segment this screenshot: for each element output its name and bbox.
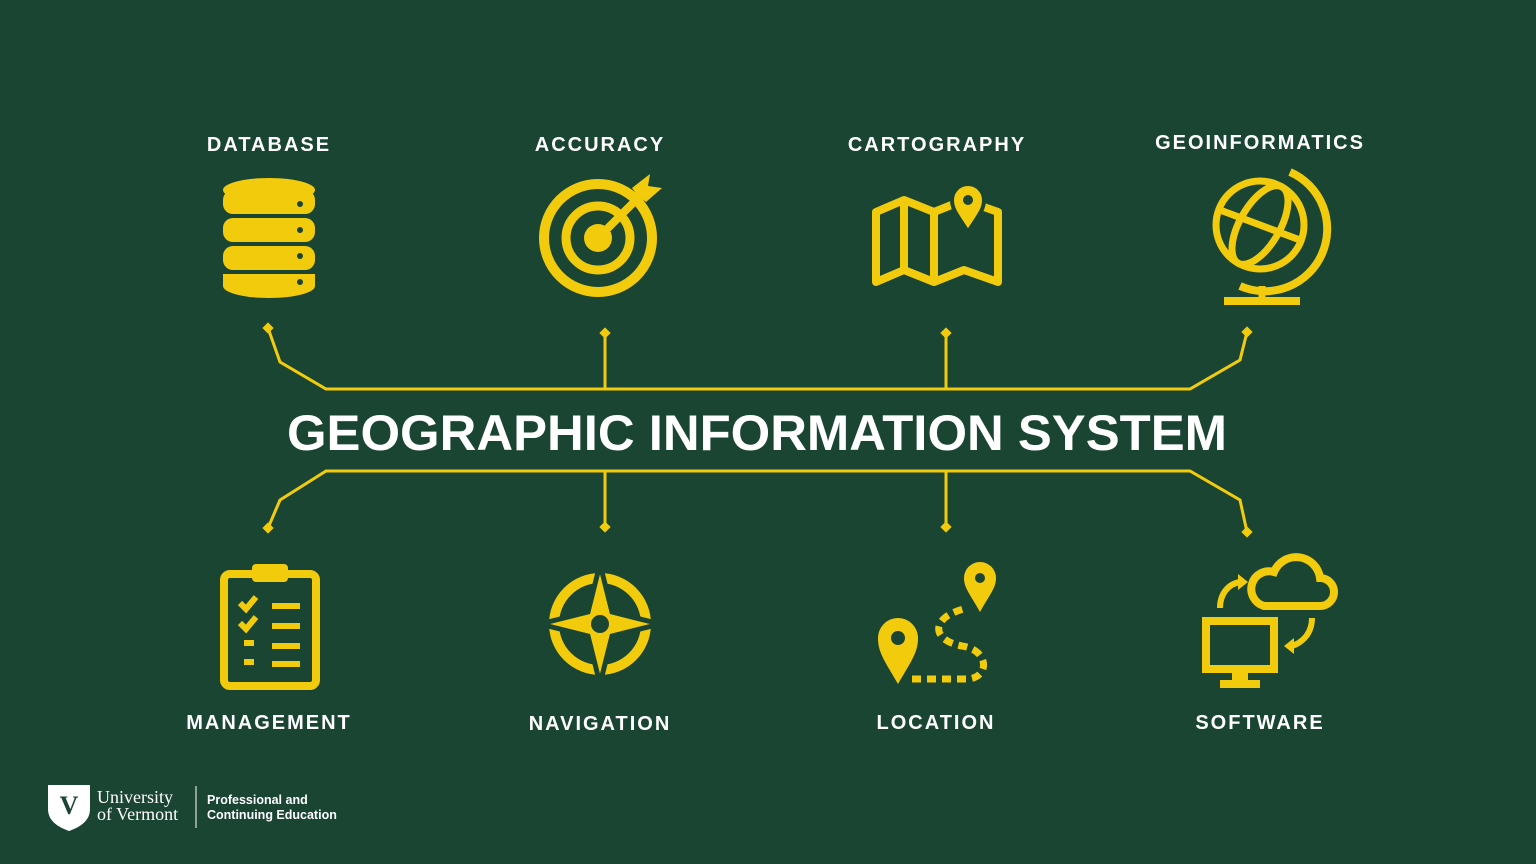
icon: compass	[540, 564, 660, 684]
logo: University	[97, 787, 173, 807]
logo	[48, 785, 337, 831]
labels: MANAGEMENT	[186, 712, 352, 734]
icon: clipboard	[224, 564, 316, 686]
logo: Continuing Education	[207, 808, 337, 822]
icon: target	[544, 174, 662, 292]
labels: GEOINFORMATICS	[1155, 132, 1365, 154]
icon: software	[1206, 557, 1334, 688]
labels: CARTOGRAPHY	[848, 134, 1026, 156]
icon: database	[223, 178, 315, 298]
icon: globe	[1216, 172, 1327, 301]
connector lines	[268, 328, 1247, 532]
labels	[186, 132, 1365, 735]
title: GEOGRAPHIC INFORMATION SYSTEM	[287, 405, 1227, 461]
logo: V	[60, 791, 79, 820]
labels: NAVIGATION	[529, 713, 671, 735]
labels: SOFTWARE	[1195, 712, 1325, 734]
labels: ACCURACY	[535, 134, 665, 156]
labels: LOCATION	[877, 712, 995, 734]
icon: map	[876, 184, 998, 282]
logo: Professional and	[207, 793, 308, 807]
logo: of Vermont	[97, 804, 178, 824]
icon: location route	[878, 562, 996, 684]
labels: DATABASE	[207, 134, 331, 156]
